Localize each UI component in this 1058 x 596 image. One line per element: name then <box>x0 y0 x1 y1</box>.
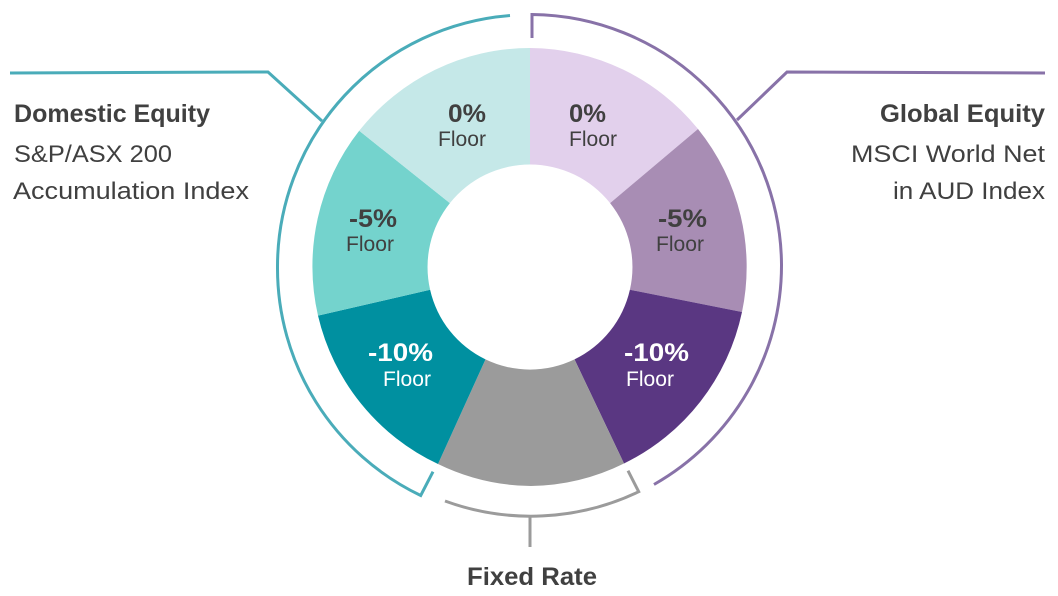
segment: domestic equity -5% floor: -5% <box>349 205 397 233</box>
segment: global equity -10% floor: Floor <box>626 368 674 391</box>
label: domestic equity <box>13 100 249 205</box>
segment: domestic equity 0% floor <box>359 48 530 203</box>
bracket: fixed rate <box>445 471 639 547</box>
segment: fixed rate <box>438 359 624 486</box>
segment: domestic equity -5% floor <box>312 131 450 316</box>
label: global equity <box>851 100 1045 205</box>
segment: domestic equity -10% floor: -10% <box>368 339 433 367</box>
label: domestic equity: Accumulation Index <box>13 178 249 205</box>
bracket: domestic equity <box>10 16 510 496</box>
label: fixed rate: Fixed Rate <box>467 563 597 591</box>
segment: global equity 0% floor: 0% <box>569 100 606 128</box>
segment: global equity -10% floor: -10% <box>624 339 689 367</box>
segment: global equity -5% floor <box>610 129 747 312</box>
label: domestic equity: S&P/ASX 200 <box>14 141 172 168</box>
segment: domestic equity -5% floor: Floor <box>346 233 394 256</box>
label: global equity: MSCI World Net <box>851 141 1045 168</box>
segment: global equity -5% floor: -5% <box>658 205 707 233</box>
segment: global equity 0% floor <box>530 48 698 203</box>
label: global equity: Global Equity <box>880 100 1045 128</box>
donut chart <box>312 48 747 486</box>
segment: domestic equity 0% floor: Floor <box>438 128 486 151</box>
segment: global equity 0% floor: Floor <box>569 128 617 151</box>
segment: domestic equity 0% floor: 0% <box>448 100 486 128</box>
bracket: global equity <box>532 14 1045 484</box>
segment: global equity -10% floor <box>574 290 742 464</box>
label: global equity: in AUD Index <box>893 178 1045 205</box>
segment: domestic equity -10% floor <box>318 290 486 464</box>
segment: global equity -5% floor: Floor <box>656 233 704 256</box>
label: domestic equity: Domestic Equity <box>14 100 210 128</box>
segment: domestic equity -10% floor: Floor <box>383 368 431 391</box>
